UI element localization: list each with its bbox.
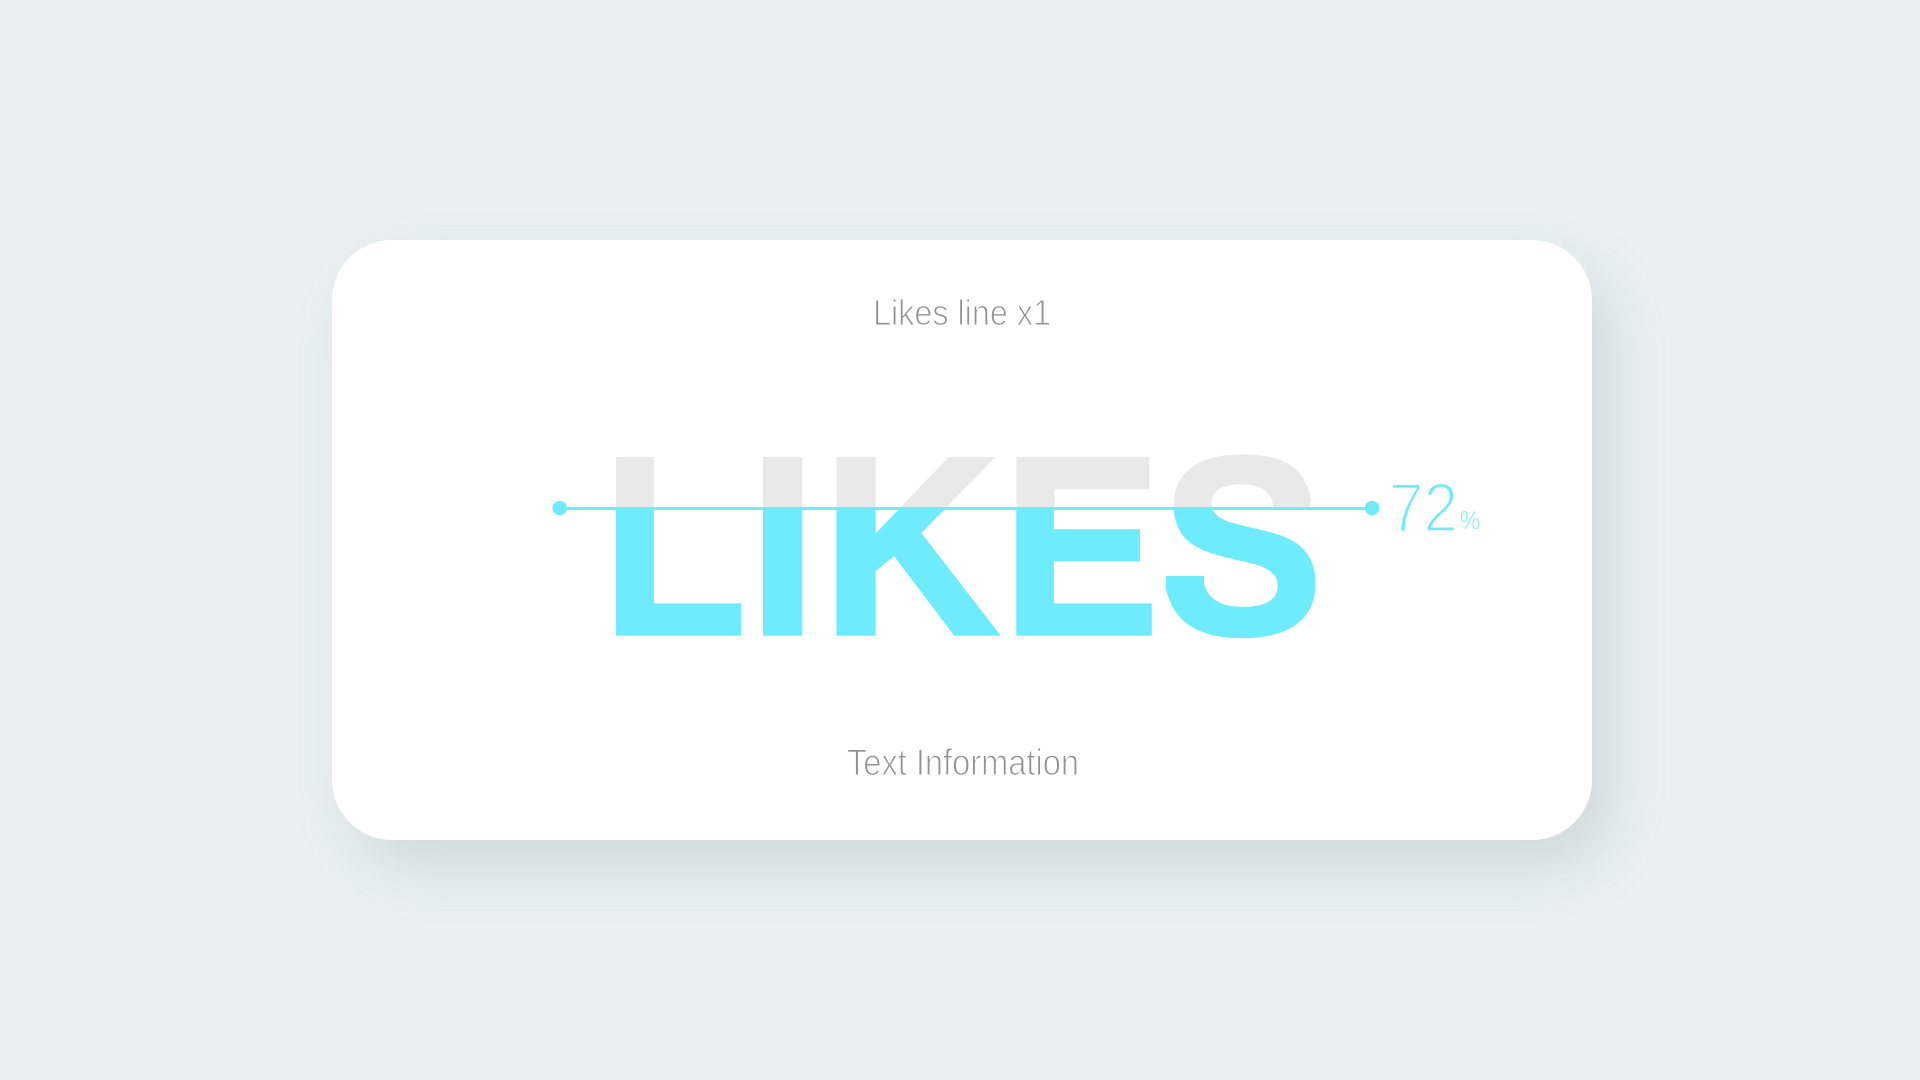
word: LIKES filled blue portion: K: [822, 404, 999, 688]
word: LIKES unfilled grey portion: E: [1002, 405, 1162, 688]
value: 72 percent: 72: [1389, 468, 1458, 546]
value: 72 percent: %: [1460, 505, 1480, 535]
panel: white card: [332, 240, 1592, 840]
word: LIKES filled blue portion: [616, 510, 1316, 638]
word: LIKES unfilled grey portion: L: [602, 404, 746, 688]
word: LIKES unfilled grey portion: S: [1161, 404, 1323, 688]
heading: Likes line x1: Likes line x1: [873, 292, 1051, 333]
word: LIKES unfilled grey portion: [616, 454, 1312, 507]
word: LIKES filled blue portion: S: [1161, 404, 1323, 688]
caption: Text Information: Text Information: [847, 742, 1079, 783]
word: LIKES unfilled grey portion: I: [748, 404, 817, 689]
infographic content: [552, 300, 1480, 775]
word: LIKES filled blue portion: L: [602, 404, 746, 688]
word: LIKES filled blue portion: E: [1002, 404, 1159, 688]
progress line with end dots: [552, 501, 1379, 515]
word: LIKES filled blue portion: I: [748, 404, 817, 689]
word: LIKES unfilled grey portion: K: [822, 404, 999, 688]
